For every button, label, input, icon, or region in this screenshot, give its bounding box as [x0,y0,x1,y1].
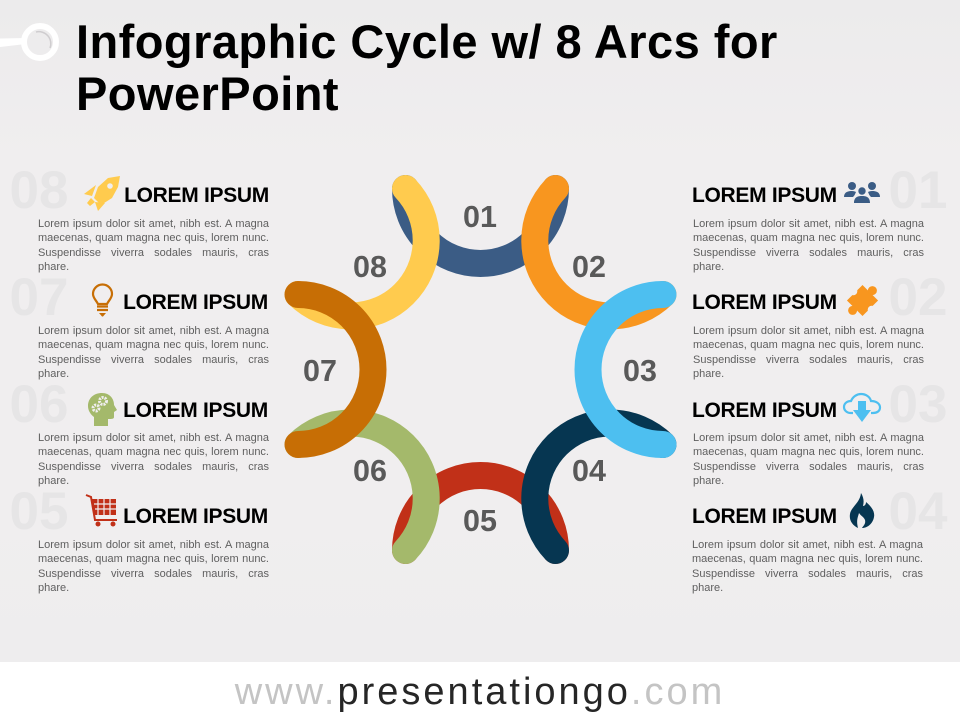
title [76,15,778,120]
description: Lorem ipsum dolor sit amet, nibh est. A magna [693,218,924,230]
arc number 03: 03 [623,354,657,388]
description: phare. [693,475,724,487]
heading: LOREM IPSUM [692,399,837,422]
description: Lorem ipsum dolor sit amet, nibh est. A magna [692,539,923,551]
heading: LOREM IPSUM [692,291,837,314]
icon: flame [850,493,874,528]
panel: item 03 [692,375,947,487]
heading: LOREM IPSUM [123,399,268,422]
description: Lorem ipsum dolor sit amet, nibh est. A magna [693,432,924,444]
description: Lorem ipsum dolor sit amet, nibh est. A magna [38,539,269,551]
icon: shopping cart [86,494,117,526]
description: maecenas, quam magna nec quis, lorem nunc. [38,553,269,565]
watermark number 06: 06 [10,375,68,434]
description: phare. [693,261,724,273]
description: maecenas, quam magna nec quis, lorem nunc. [693,339,924,351]
footer url: www.presentationgo.com [235,671,725,713]
arc 02 [535,188,663,316]
panel: item 01 [692,161,947,273]
icon: cloud download [842,392,882,422]
panel: item 07 [10,268,269,380]
description: phare. [38,261,69,273]
description: Suspendisse viverra sodales mauris, cras [38,568,269,580]
arc number 05: 05 [463,504,497,538]
watermark number 02: 02 [889,268,947,327]
description: phare. [38,368,69,380]
description: maecenas, quam magna nec quis, lorem nunc. [693,232,924,244]
description: Lorem ipsum dolor sit amet, nibh est. A magna [693,325,924,337]
arc 06 [298,423,426,550]
arc number 02: 02 [572,250,606,284]
watermark number 05: 05 [10,482,68,541]
watermark number 08: 08 [10,161,68,220]
icon: white ring pin [0,23,59,61]
description: maecenas, quam magna nec quis, lorem nunc. [692,553,923,565]
panel: item 04 [692,482,947,594]
description: Suspendisse viverra sodales mauris, cras [692,568,923,580]
description: maecenas, quam magna nec quis, lorem nunc. [38,232,269,244]
description: Suspendisse viverra sodales mauris, cras [38,354,269,366]
panel: item 06 [10,375,269,487]
description: Lorem ipsum dolor sit amet, nibh est. A magna [38,218,269,230]
panel: item 08 [10,161,269,273]
arc 07 [298,294,373,444]
watermark number 04: 04 [889,482,947,541]
description: phare. [692,582,723,594]
watermark number 01: 01 [889,161,947,220]
description [38,539,269,594]
heading: LOREM IPSUM [124,184,269,207]
description: maecenas, quam magna nec quis, lorem nunc. [693,446,924,458]
title: Infographic Cycle w/ 8 Arcs for [76,15,778,68]
description: Suspendisse viverra sodales mauris, cras [693,461,924,473]
heading: LOREM IPSUM [123,291,268,314]
description: Suspendisse viverra sodales mauris, cras [38,461,269,473]
icon: head with gears [88,393,117,426]
description [693,325,924,380]
footer band [0,662,960,720]
description: Lorem ipsum dolor sit amet, nibh est. A magna [38,325,269,337]
description: Lorem ipsum dolor sit amet, nibh est. A magna [38,432,269,444]
arc number 07: 07 [303,354,337,388]
arc number 06: 06 [353,454,387,488]
description: Suspendisse viverra sodales mauris, cras [38,247,269,259]
icon: group of people [844,182,880,203]
arc 04 [535,423,663,550]
description [38,432,269,487]
arc number 01: 01 [463,200,497,234]
description: Suspendisse viverra sodales mauris, cras [693,247,924,259]
icon: rocket [84,176,120,211]
description: Suspendisse viverra sodales mauris, cras [693,354,924,366]
description [692,539,923,594]
title: PowerPoint [76,67,339,120]
arc number 08: 08 [353,250,387,284]
arc number 04: 04 [572,454,606,488]
icon: puzzle piece [847,285,878,316]
description [38,218,269,273]
description: phare. [38,475,69,487]
description: phare. [38,582,69,594]
description: maecenas, quam magna nec quis, lorem nunc. [38,446,269,458]
arc 01 [406,188,556,264]
description [693,432,924,487]
panel: item 02 [692,268,947,380]
description [38,325,269,380]
arc 08 [298,188,426,316]
description [693,218,924,273]
description: maecenas, quam magna nec quis, lorem nunc. [38,339,269,351]
arc 03 [588,294,663,444]
watermark number 07: 07 [10,268,68,327]
description: phare. [693,368,724,380]
icon: light bulb [92,283,114,316]
panel: item 05 [10,482,269,594]
heading: LOREM IPSUM [692,505,837,528]
watermark number 03: 03 [889,375,947,434]
heading: LOREM IPSUM [123,505,268,528]
heading: LOREM IPSUM [692,184,837,207]
arc 05 [406,476,556,550]
